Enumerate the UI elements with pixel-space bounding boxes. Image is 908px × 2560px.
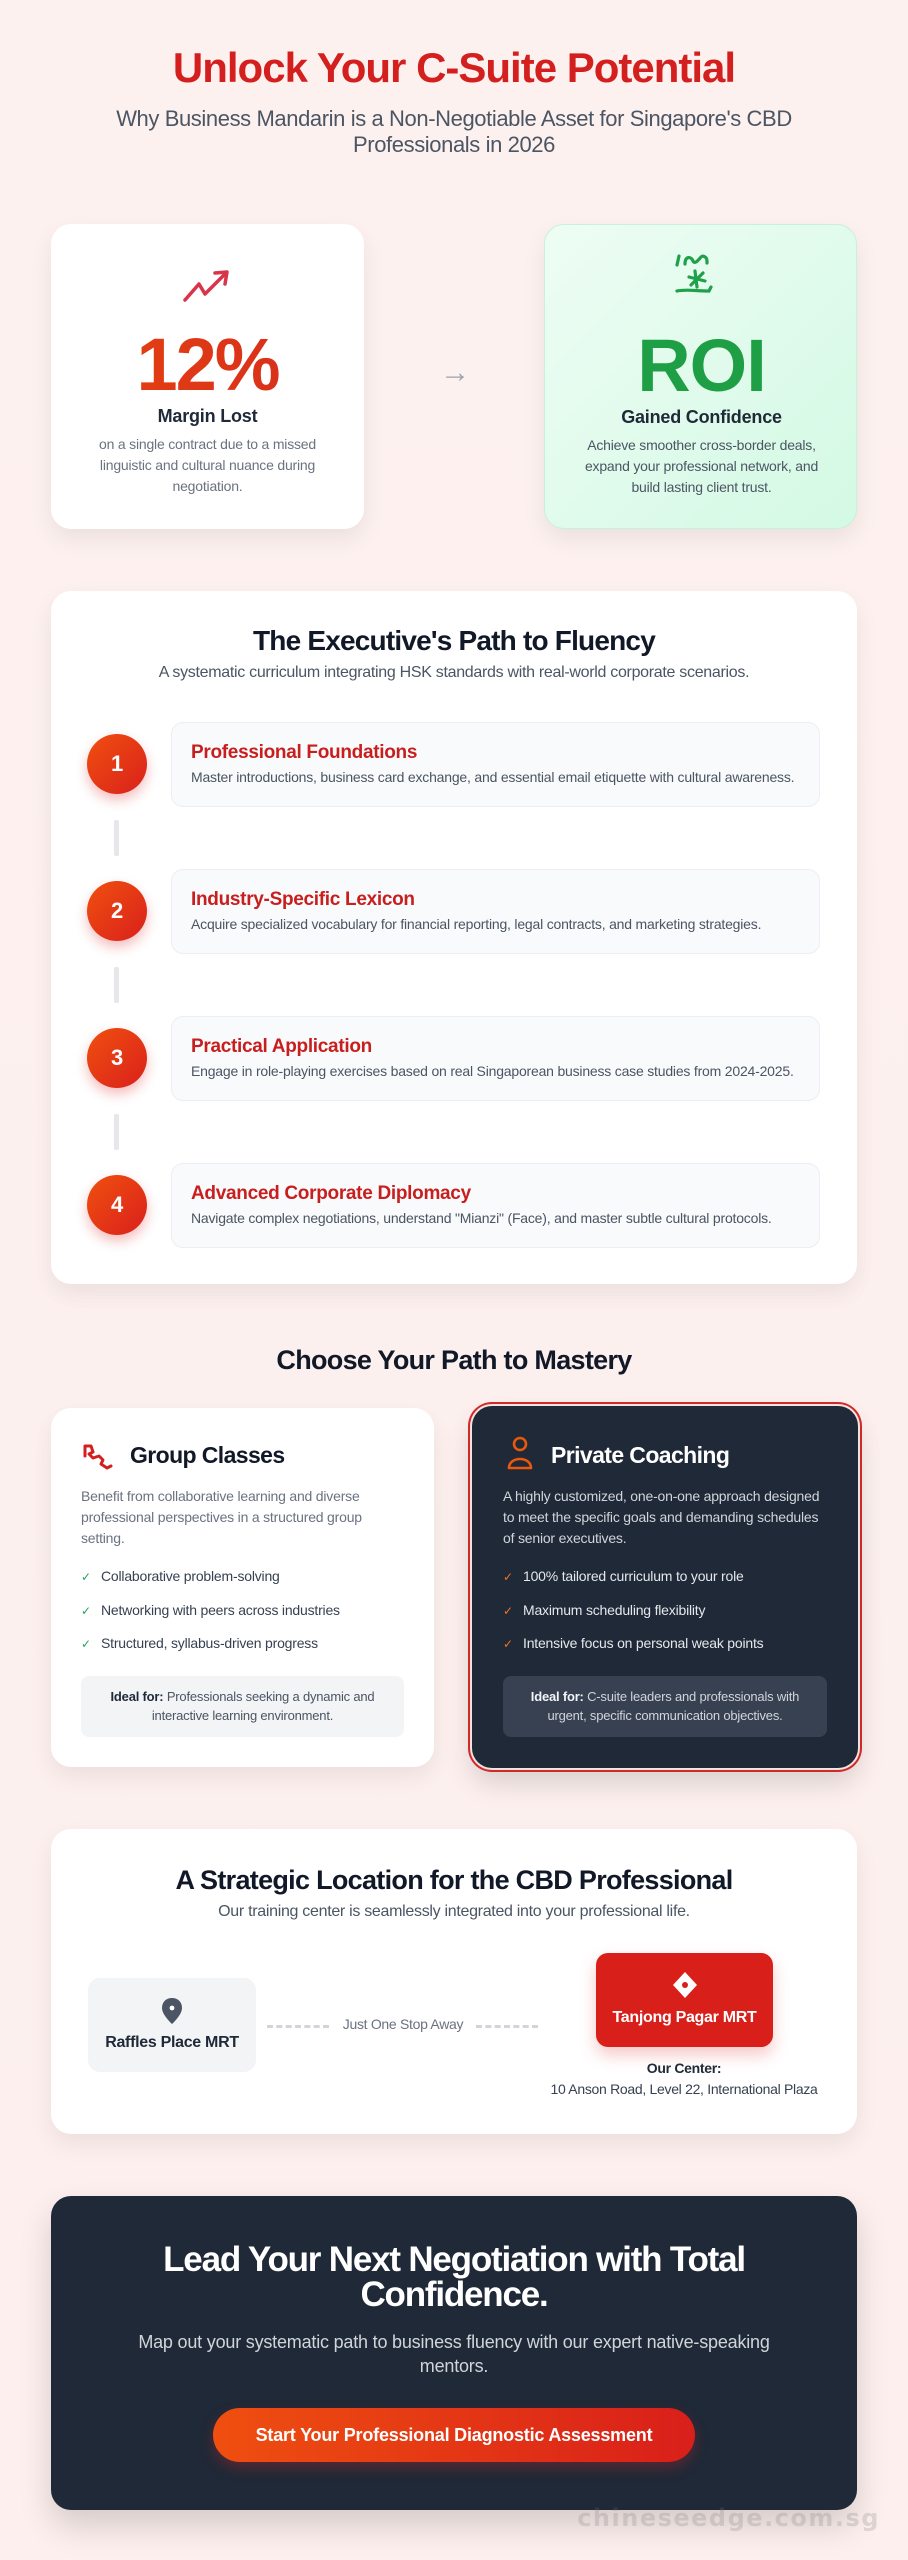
checklist: ✓ [81,1637,91,1651]
title: Unlock Your C-Suite Potential [173,44,735,91]
step 4: Advanced Corporate Diplomacy [191,1183,471,1204]
checklist: ✓ [503,1604,513,1618]
panel: executive path [51,591,857,1284]
step 3: Practical Application [191,1036,372,1057]
heading: choose path: Choose Your Path to Mastery [276,1345,632,1375]
button: Start Your Professional Diagnostic Assessment [256,2425,652,2445]
step 1: 1 [111,751,123,776]
step 4 [81,1163,820,1248]
step 3: Engage in role-playing exercises based on real Singaporean business case studies from 2024-2025. [191,1063,794,1079]
panel: margin lost card [51,224,364,529]
step 4: Navigate complex negotiations, understand "Mianzi" (Face), and master subtle cultural protocols. [191,1210,772,1226]
station: raffles place: Raffles Place MRT [105,2034,239,2051]
description: Achieve smoother cross-border deals, expand your professional network, and build lasting client trust. [585,437,818,495]
checklist: Collaborative problem-solving [101,1568,280,1584]
heading: A Strategic Location for the CBD Professional [175,1865,733,1895]
connector: one stop [267,2016,538,2032]
icon: group [84,1444,113,1470]
panel: location [51,1829,857,2134]
stat: 12% [51,322,364,407]
checklist: 100% tailored curriculum to your role [523,1568,744,1584]
description: Benefit from collaborative learning and diverse professional perspectives in a structured group setting. [81,1488,362,1546]
step 3: 3 [111,1045,123,1070]
watermark: chineseedge.com.sg [577,2504,880,2532]
ideal for box [81,1676,404,1737]
icon: person [508,1436,532,1470]
ideal for box: Ideal for: C-suite leaders and professionals with urgent, specific communication objectives. [531,1689,799,1723]
label: Margin Lost [158,406,257,426]
description: on a single contract due to a missed linguistic and cultural nuance during negotiation. [99,436,316,494]
icon: pin [162,1998,182,2024]
address [550,2060,818,2097]
station: raffles place [88,1978,256,2072]
ideal for box [503,1676,827,1737]
station: tanjong pagar: Tanjong Pagar MRT [613,2009,756,2026]
address: 10 Anson Road, Level 22, International Plaza [550,2081,818,2097]
panel: group classes [51,1408,434,1767]
icon: confidence glyph [675,254,713,293]
step 1 [81,722,820,807]
step 3 [81,1016,820,1101]
checklist: Maximum scheduling flexibility [523,1602,705,1618]
step 2 [81,869,820,954]
subtext: Map out your systematic path to business fluency with our expert native-speaking mentors. [138,2332,770,2376]
checklist: ✓ [81,1570,91,1584]
arrow: → [440,356,470,389]
stat: 12%: 12% [136,323,279,406]
panel: private coaching [472,1406,858,1768]
description: A highly customized, one-on-one approach designed to meet the specific goals and demanding schedules of senior executives. [503,1488,819,1546]
checklist: ✓ [503,1570,513,1584]
icon: trending arrow [183,270,229,302]
heading: Lead Your Next Negotiation with Total Confidence. [163,2240,745,2314]
step 2: Industry-Specific Lexicon [191,889,415,910]
stat: ROI: ROI [637,324,766,407]
heading: Group Classes [130,1442,285,1468]
checklist: Networking with peers across industries [101,1602,340,1618]
label: Gained Confidence [621,407,782,427]
checklist [81,1568,340,1651]
panel: ROI card [544,224,857,529]
step 2: Acquire specialized vocabulary for financial reporting, legal contracts, and marketing strategies. [191,916,761,932]
step 1: Professional Foundations [191,742,417,763]
icon: diamond [673,1972,697,1998]
panel: call to action [51,2196,857,2510]
subheading: Our training center is seamlessly integrated into your professional life. [218,1903,690,1920]
checklist: ✓ [81,1604,91,1618]
address: Our Center: [647,2060,721,2076]
subheading: path: A systematic curriculum integrating HSK standards with real-world corporate scenarios. [159,664,749,681]
step 4: 4 [111,1192,123,1217]
heading: path: The Executive's Path to Fluency [253,625,655,656]
ideal for box: Ideal for: Professionals seeking a dynamic and interactive learning environment. [111,1689,374,1723]
checklist: ✓ [503,1637,513,1651]
step 1: Master introductions, business card exchange, and essential email etiquette with cultural awareness. [191,769,794,785]
subtitle: Why Business Mandarin is a Non-Negotiable Asset for Singapore's CBD Professionals in 2026 [116,106,792,157]
checklist: Intensive focus on personal weak points [523,1635,763,1651]
heading: Private Coaching [551,1442,729,1468]
button [213,2408,695,2462]
checklist [503,1568,764,1651]
step 2: 2 [111,898,123,923]
checklist: Structured, syllabus-driven progress [101,1635,318,1651]
connector: one stop: Just One Stop Away [343,2016,463,2032]
station: tanjong pagar [596,1953,773,2047]
